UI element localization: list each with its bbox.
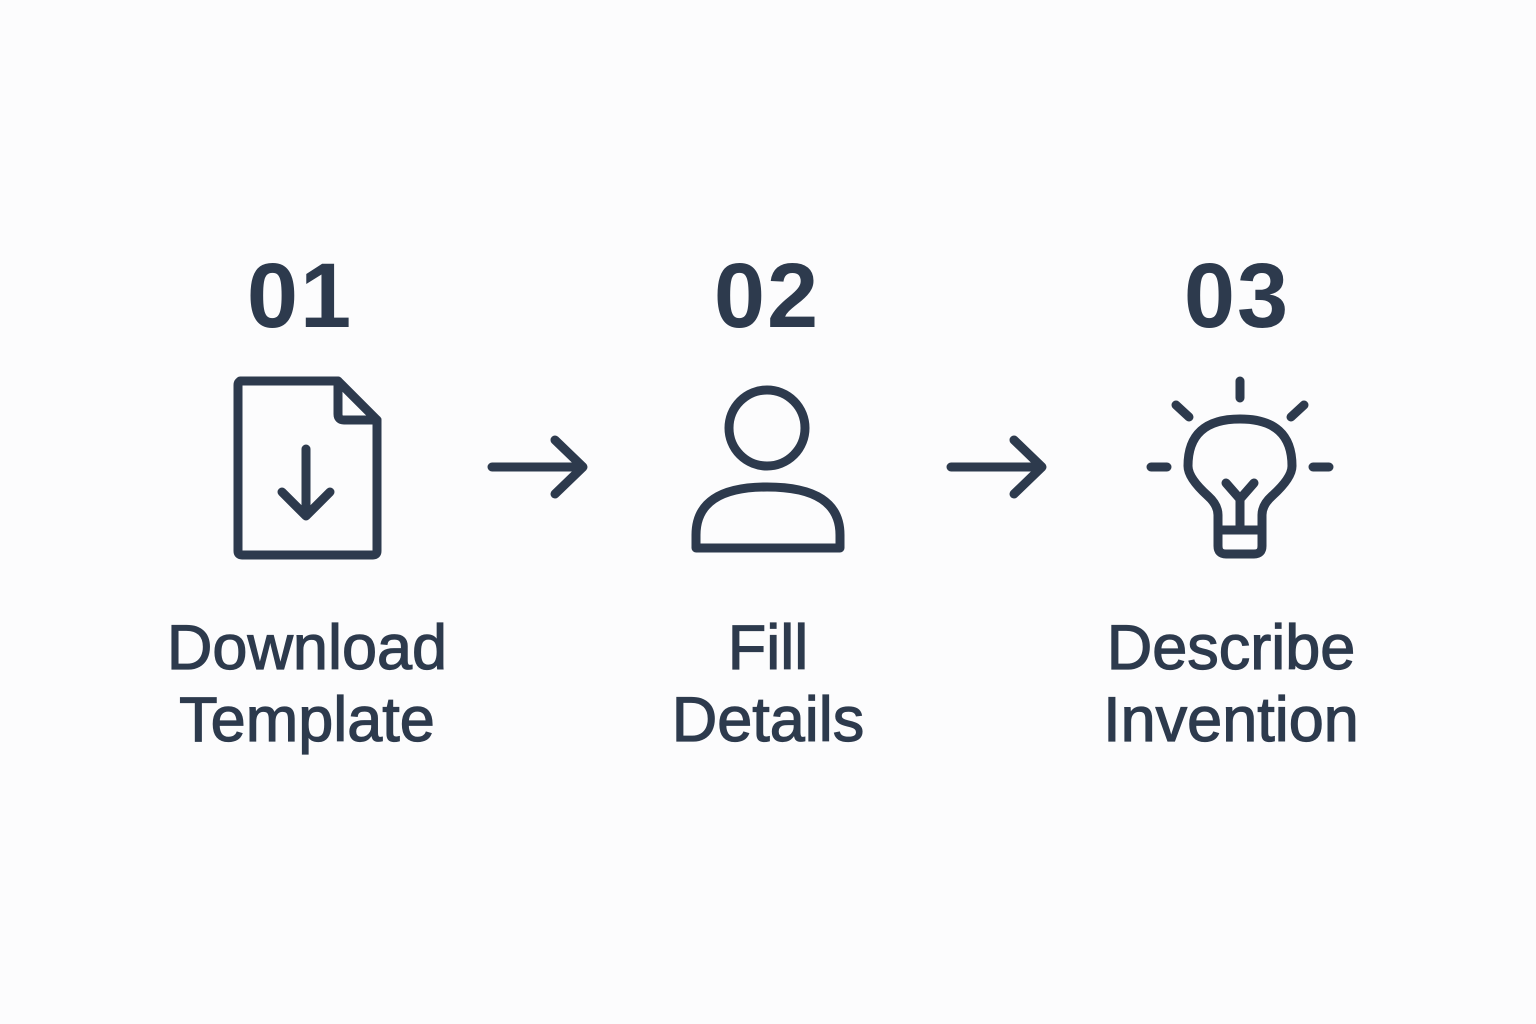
label 3 bbox=[1103, 613, 1359, 755]
step 3 number: 03 bbox=[1184, 245, 1290, 347]
icon: lightbulb bbox=[1151, 381, 1329, 554]
step 1 number: 01 bbox=[247, 245, 353, 347]
label 2: Fill bbox=[728, 613, 808, 683]
arrow 1 bbox=[492, 440, 583, 494]
label 1 bbox=[167, 613, 447, 755]
icon: person bbox=[696, 390, 840, 548]
arrow 2 bbox=[951, 440, 1042, 494]
label 3: Describe bbox=[1107, 613, 1355, 683]
step 2 number: 02 bbox=[714, 245, 820, 347]
label 2: Details bbox=[672, 685, 864, 755]
label 2 bbox=[672, 613, 864, 755]
label 1: Download bbox=[167, 613, 447, 683]
label 3: Invention bbox=[1103, 685, 1359, 755]
label 1: Template bbox=[179, 685, 435, 755]
icon: document download bbox=[238, 381, 377, 555]
